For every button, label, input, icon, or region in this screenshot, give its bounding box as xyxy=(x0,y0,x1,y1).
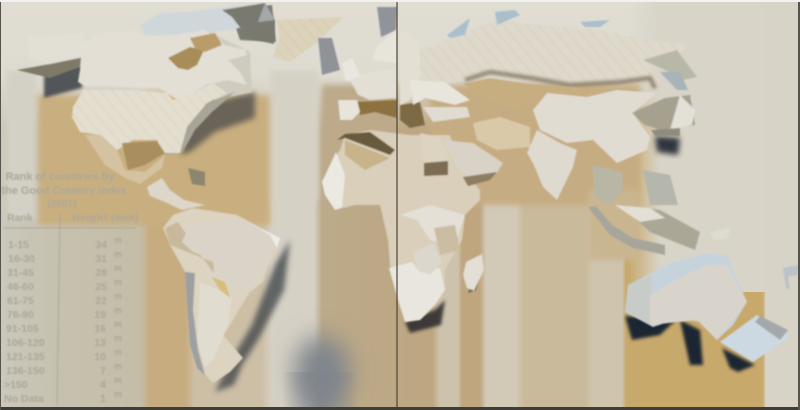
Southeast Asia xyxy=(592,165,623,205)
legend height column xyxy=(94,239,107,405)
legend rank column: 16-30 xyxy=(8,253,35,265)
legend headers xyxy=(7,212,139,224)
legend swatch column: m xyxy=(114,361,122,371)
Argentina xyxy=(197,282,232,368)
legend swatch column: m xyxy=(114,347,122,357)
Iceland block xyxy=(318,38,340,75)
legend headers: Height (mm) xyxy=(72,212,139,224)
Eastern Europe xyxy=(400,30,422,105)
Iran xyxy=(473,117,530,150)
legend rank column: 121-135 xyxy=(6,351,45,363)
legend swatch column: m xyxy=(114,277,122,287)
Arctic islands xyxy=(140,3,275,44)
Alaska xyxy=(17,33,84,78)
legend rank column: 91-105 xyxy=(6,323,39,335)
legend rank column xyxy=(4,239,45,405)
Korea and Japan xyxy=(632,50,697,136)
Hudson Bay xyxy=(168,47,204,70)
Asia xyxy=(410,10,697,205)
Bolivia xyxy=(212,277,230,298)
legend rank column: 61-75 xyxy=(7,295,34,307)
legend swatch column: m xyxy=(114,389,122,399)
central Europe xyxy=(350,68,397,100)
Egypt xyxy=(420,133,450,163)
legend rank column: 136-150 xyxy=(6,365,45,377)
Pacific island xyxy=(783,265,798,290)
Iberia xyxy=(338,100,360,120)
legend swatch column: m xyxy=(114,235,122,245)
legend rank column: >150 xyxy=(4,379,28,391)
legend height column: 4 xyxy=(100,379,106,391)
legend title: the Good Country Index xyxy=(1,185,128,197)
legend height column: 34 xyxy=(95,239,107,251)
New Zealand xyxy=(720,315,790,362)
Europe xyxy=(338,7,425,128)
India xyxy=(527,130,577,200)
UK xyxy=(342,58,362,83)
Caribbean block xyxy=(188,168,205,186)
Saudi Arabia xyxy=(443,140,503,177)
legend height column: 13 xyxy=(94,337,106,349)
Canada xyxy=(78,30,247,100)
Canada side faces xyxy=(205,30,252,100)
legend swatch column: m xyxy=(114,249,122,259)
map: North America xyxy=(17,3,275,210)
legend rank column: 1-15 xyxy=(8,239,29,251)
legend headers: Rank xyxy=(7,212,33,224)
Algeria xyxy=(345,140,390,170)
legend height column: 7 xyxy=(100,365,106,377)
legend height column: 22 xyxy=(95,295,107,307)
legend height column: 1 xyxy=(100,393,106,405)
Turkey xyxy=(423,107,470,122)
legend height column: 28 xyxy=(95,267,107,279)
legend swatch column: m xyxy=(114,319,122,329)
legend title: Rank of countries by xyxy=(6,171,115,183)
Indonesia xyxy=(588,205,730,255)
legend title: (2007) xyxy=(48,199,76,210)
legend table xyxy=(1,171,139,405)
Brazil xyxy=(182,218,273,292)
Russia xyxy=(420,20,690,85)
Central America xyxy=(147,178,205,210)
South America xyxy=(163,208,280,383)
legend table rules xyxy=(3,213,136,405)
legend height column: 16 xyxy=(94,323,106,335)
Madagascar xyxy=(463,254,484,291)
USA side face xyxy=(163,92,235,155)
Kazakhstan and Mongolia xyxy=(463,78,617,110)
Africa xyxy=(322,130,480,322)
legend rank column: 106-120 xyxy=(6,337,45,349)
legend rank column: No Data xyxy=(4,393,44,405)
legend rank column: 31-45 xyxy=(7,267,34,279)
north coast shadow xyxy=(465,72,655,88)
Scandinavia xyxy=(377,7,397,37)
legend rank column: 76-90 xyxy=(7,309,34,321)
legend swatch column xyxy=(114,235,122,399)
legend swatch column: m xyxy=(114,263,122,273)
legend swatch column: m xyxy=(114,375,122,385)
legend rank column: 46-60 xyxy=(7,281,34,293)
Mexico xyxy=(85,135,165,184)
legend title xyxy=(1,171,128,210)
Southern Africa xyxy=(389,262,445,322)
Arctic Russia islands xyxy=(447,10,610,38)
USA xyxy=(72,83,227,153)
Central Africa xyxy=(400,205,465,245)
legend swatch column: m xyxy=(114,333,122,343)
legend height column: 19 xyxy=(94,309,106,321)
Australia xyxy=(625,253,747,340)
legend height column: 25 xyxy=(95,281,107,293)
China xyxy=(533,90,657,163)
legend height column: 31 xyxy=(95,253,107,265)
legend swatch column: m xyxy=(114,291,122,301)
Greenland xyxy=(273,17,343,62)
legend swatch column: m xyxy=(114,305,122,315)
legend height column: 10 xyxy=(94,351,106,363)
